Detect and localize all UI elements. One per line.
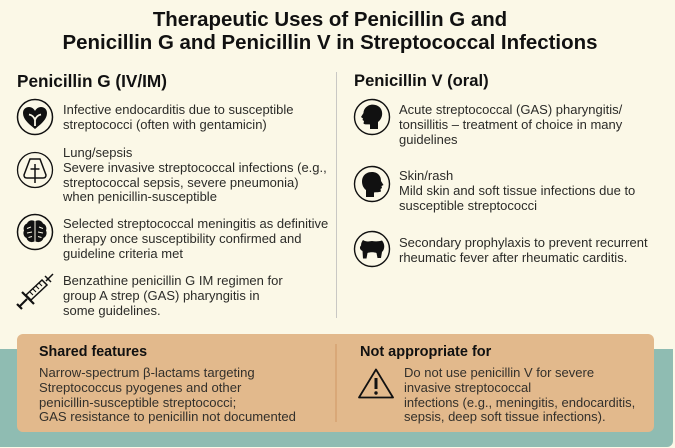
not appropriate [358, 344, 635, 424]
heading: not appropriate for: Not appropriate for [360, 344, 491, 360]
text: lung/sepsis [63, 145, 327, 204]
text: skin/rash: Mild skin and soft tissue infections due to [399, 183, 635, 198]
text: pharyngitis: Acute streptococcal (GAS) pharyngitis/ [399, 102, 622, 117]
text: prophylaxis: Secondary prophylaxis to prevent recurrent [399, 235, 648, 250]
title: Therapeutic Uses of Penicillin G and [153, 8, 507, 31]
icon: brain [16, 214, 54, 250]
text: not appropriate [404, 365, 635, 424]
text: meningitis: Selected streptococcal meningitis as definitive [63, 216, 328, 231]
text: not appropriate: invasive streptococcal [404, 380, 531, 395]
text: meningitis: therapy once susceptibility confirmed and [63, 231, 301, 246]
icon: heart [16, 98, 54, 136]
text: benzathine [63, 273, 283, 318]
title: Penicillin G and Penicillin V in Streptococcal Infections [63, 31, 597, 54]
text: meningitis: guideline criteria met [63, 246, 183, 261]
text: prophylaxis [399, 235, 648, 265]
panel: Penicillin G [16, 71, 328, 318]
text: shared features: Streptococcus pyogenes and other [39, 380, 241, 395]
heading: shared features: Shared features [39, 344, 147, 360]
text: lung/sepsis: Severe invasive streptococcal infections (e.g., [63, 160, 327, 175]
text: benzathine: group A strep (GAS) pharyngitis in [63, 288, 260, 303]
text: lung/sepsis: streptococcal sepsis, severe pneumonia) [63, 175, 299, 190]
text: pharyngitis: guidelines [399, 132, 458, 147]
text: lung/sepsis: when penicillin-susceptible [63, 189, 217, 204]
text: endocarditis [63, 102, 294, 132]
text: skin/rash [399, 168, 635, 213]
text: lung/sepsis: Lung/sepsis [63, 145, 132, 160]
panel divider [335, 344, 337, 422]
text: skin/rash: Skin/rash [399, 168, 453, 183]
icon: warning [358, 368, 394, 398]
panel: bottom callout [17, 334, 654, 432]
teal footer band [0, 349, 673, 447]
text: prophylaxis: rheumatic fever after rheumatic carditis. [399, 250, 627, 265]
text: endocarditis: streptococci (often with gentamicin) [63, 117, 267, 132]
text: benzathine: some guidelines. [63, 303, 161, 318]
panel: Penicillin V [354, 71, 648, 268]
icon: heart organ [354, 230, 390, 268]
text: endocarditis: Infective endocarditis due to susceptible [63, 102, 294, 117]
icon: head facing left [354, 98, 390, 136]
icon: head facing right [354, 166, 390, 202]
shared features [39, 344, 296, 424]
text: pharyngitis: tonsillitis – treatment of choice in many [399, 117, 622, 132]
title [63, 8, 597, 54]
text: not appropriate: infections (e.g., meningitis, endocarditis, [404, 395, 635, 410]
text: shared features: Narrow-spectrum β-lactams targeting [39, 365, 255, 380]
text: meningitis [63, 216, 328, 261]
text: benzathine: Benzathine penicillin G IM regimen for [63, 273, 283, 288]
text: shared features [39, 365, 296, 424]
text: skin/rash: susceptible streptococci [399, 198, 537, 213]
heading: Penicillin G: Penicillin G (IV/IM) [17, 71, 167, 91]
heading: Penicillin V: Penicillin V (oral) [354, 71, 489, 90]
text: shared features: penicillin-susceptible streptococci; [39, 395, 236, 410]
text: not appropriate: Do not use penicillin V for severe [404, 365, 594, 380]
icon: lung [16, 152, 54, 188]
text: pharyngitis [399, 102, 622, 147]
icon: syringe [16, 274, 54, 310]
text: shared features: GAS resistance to penicillin not documented [39, 409, 296, 424]
column divider [336, 72, 337, 318]
text: not appropriate: sepsis, deep soft tissue infections). [404, 409, 606, 424]
